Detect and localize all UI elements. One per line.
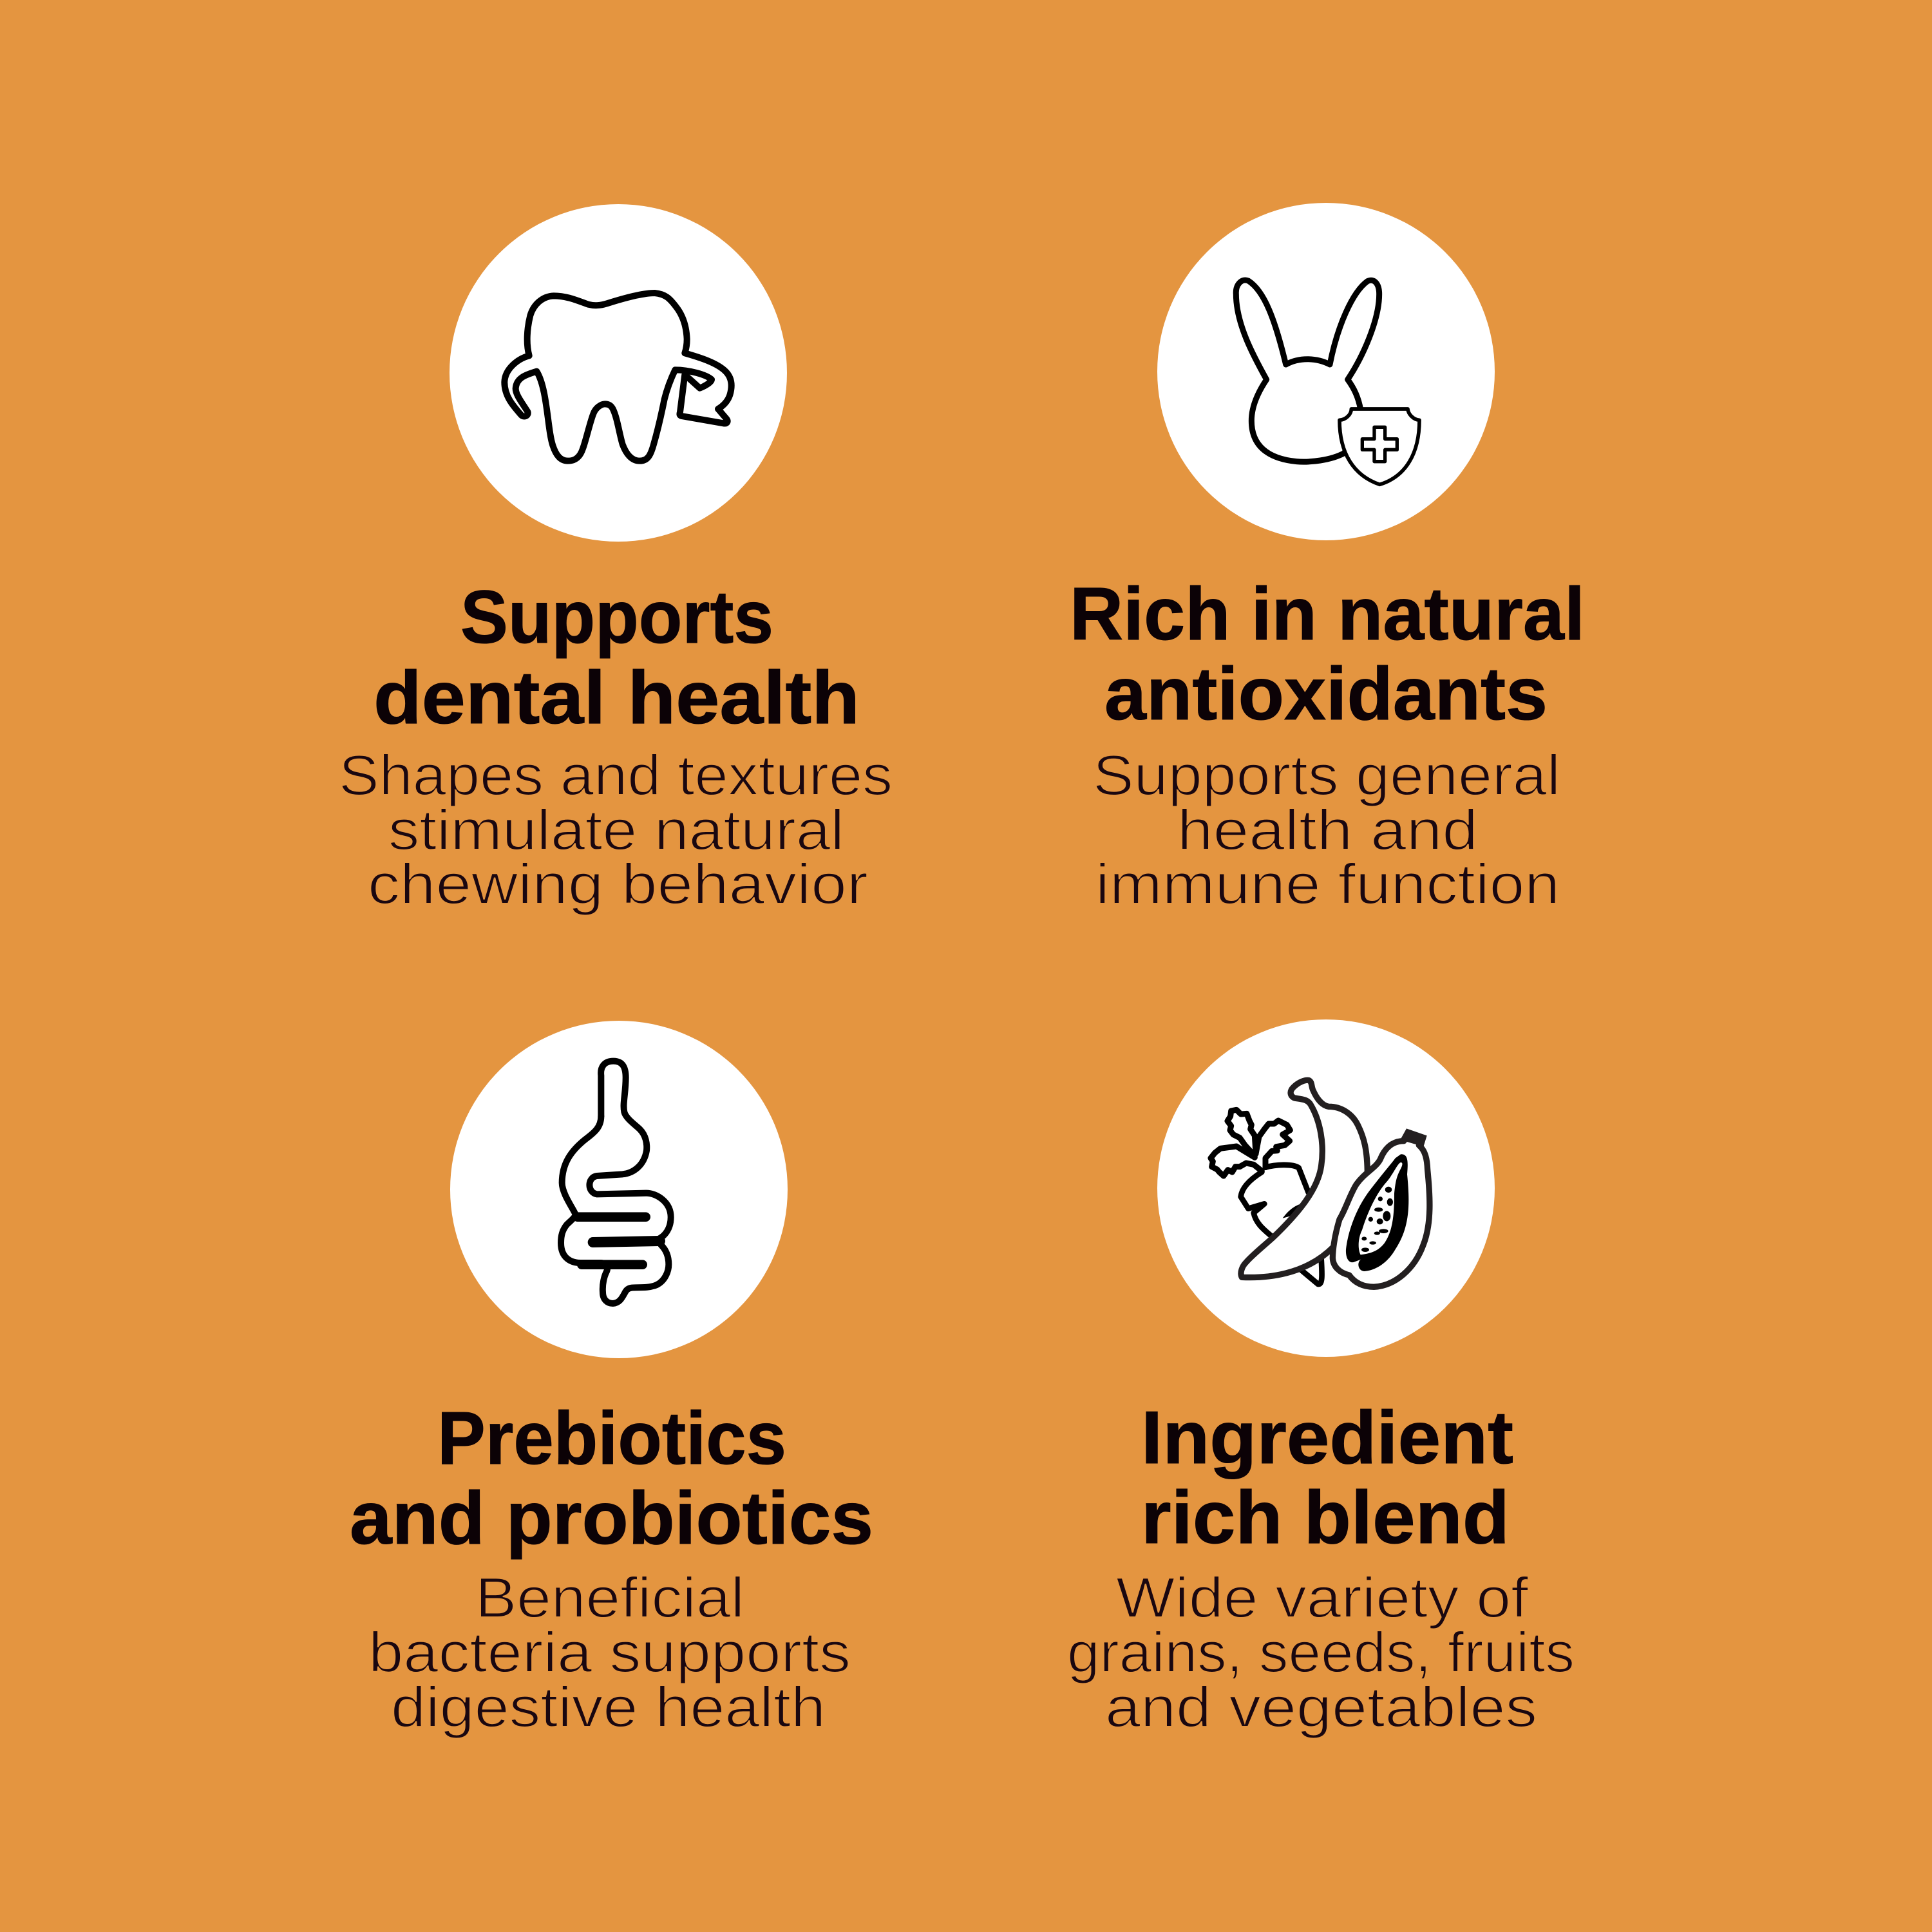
heading: Ingredient rich blend: Ingredient (1141, 1396, 1513, 1479)
description: dental health: Shapes and textures (339, 743, 893, 807)
icon: rabbit with shield (1236, 280, 1419, 484)
panel: antioxidants (1070, 203, 1585, 916)
description: dental health: stimulate natural (388, 798, 844, 862)
icon: tooth with arrow (504, 293, 732, 461)
description: prebiotics and probiotics: digestive health (391, 1675, 826, 1739)
description: prebiotics and probiotics: Beneficial (475, 1566, 744, 1629)
heading: Prebiotics and probiotics: and probiotics (350, 1476, 873, 1560)
heading: Rich in natural antioxidants: antioxidants (1104, 652, 1548, 735)
panel: ingredient rich blend (1067, 1019, 1575, 1739)
description: ingredient rich blend (1067, 1566, 1575, 1739)
heading: Supports dental health: Supports (460, 575, 773, 659)
description: prebiotics and probiotics: bacteria supports (368, 1620, 851, 1684)
description: antioxidants (1093, 743, 1560, 916)
papaya (1332, 1128, 1430, 1287)
icon circle: antioxidants (1157, 203, 1495, 540)
description: antioxidants: health and (1177, 798, 1478, 862)
description: ingredient rich blend: grains, seeds, fruits (1067, 1620, 1575, 1684)
icon: beet, banana and papaya (1211, 1080, 1430, 1287)
description: antioxidants: Supports general (1093, 743, 1560, 807)
icon: digestive tract (561, 1061, 671, 1303)
heading: Rich in natural antioxidants: Rich in natural (1070, 572, 1585, 656)
panel: dental health (339, 204, 893, 916)
description: dental health (339, 743, 893, 916)
icon circle: dental (450, 204, 787, 542)
heading: Prebiotics and probiotics: Prebiotics (437, 1396, 786, 1480)
beet leaves and root (1211, 1110, 1322, 1284)
description: ingredient rich blend: and vegetables (1105, 1675, 1537, 1739)
panel: prebiotics and probiotics (350, 1021, 873, 1739)
description: prebiotics and probiotics (368, 1566, 851, 1739)
icon circle: digestion (450, 1021, 788, 1358)
description: antioxidants: immune function (1095, 852, 1560, 916)
heading: Ingredient rich blend (1141, 1396, 1513, 1559)
description: dental health: chewing behavior (368, 852, 868, 916)
heading: Rich in natural antioxidants (1070, 572, 1585, 735)
heading: Supports dental health (374, 575, 860, 739)
description: ingredient rich blend: Wide variety of (1116, 1566, 1529, 1629)
heading: Prebiotics and probiotics (350, 1396, 873, 1560)
heading: Ingredient rich blend: rich blend (1141, 1475, 1510, 1559)
heading: Supports dental health: dental health (374, 656, 860, 739)
banana (1241, 1080, 1367, 1278)
icon circle: ingredients (1157, 1019, 1495, 1357)
